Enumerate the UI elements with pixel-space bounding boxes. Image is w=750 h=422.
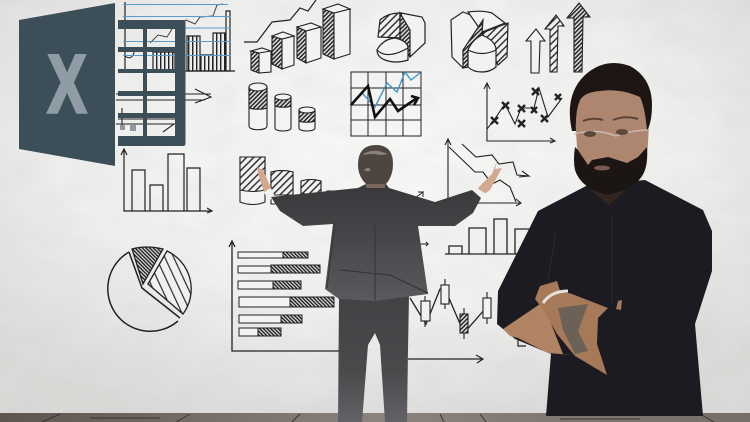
left hand (257, 167, 271, 192)
beard (574, 147, 647, 195)
wooden floor (0, 413, 750, 422)
tattoo (558, 304, 588, 354)
sketch: hatched containers behind man (240, 157, 335, 205)
sketch: 3D pie chart one (377, 13, 425, 62)
neck (590, 178, 628, 205)
lips (594, 166, 610, 170)
sketch: 3D rising bars (244, 0, 350, 73)
glasses (574, 130, 649, 136)
sketch: cylinders (249, 83, 315, 131)
neck (366, 176, 385, 188)
sketch: outlined bar chart left (121, 149, 212, 213)
jacket (271, 184, 481, 301)
sketch: scatter plot (484, 83, 562, 143)
Excel logo letter X: X (48, 38, 86, 129)
man seen from behind, arms raised (257, 145, 502, 422)
forearm far (535, 281, 608, 375)
eyebrows (583, 117, 638, 121)
shirt cuffs (264, 188, 485, 201)
sketch: rising arrows (526, 3, 590, 73)
sketch: pie chart with hatched slices (108, 247, 191, 331)
right hand (478, 158, 502, 195)
black shirt (497, 180, 712, 416)
sketch: grid line chart (350, 72, 421, 136)
sketch: horizontal stacked bars (229, 241, 340, 351)
forearm near (503, 304, 572, 355)
sketch: top-left bar and line chart (123, 2, 235, 71)
trousers (338, 295, 409, 422)
hand tucked under sleeve (616, 300, 622, 310)
bracelet (543, 291, 568, 303)
hair (570, 63, 652, 131)
sketch: simple bar chart lower right (445, 219, 529, 254)
face (576, 89, 649, 189)
sketch: falling trend chart (445, 139, 529, 206)
presenter with crossed arms (497, 63, 712, 416)
icon: Excel logo (19, 3, 186, 166)
sketch: candlestick chart (408, 192, 526, 363)
sketch: arrow chart behind Excel logo (116, 89, 211, 132)
head and hair (358, 145, 393, 184)
sketch: 3D pie chart two (451, 11, 508, 72)
